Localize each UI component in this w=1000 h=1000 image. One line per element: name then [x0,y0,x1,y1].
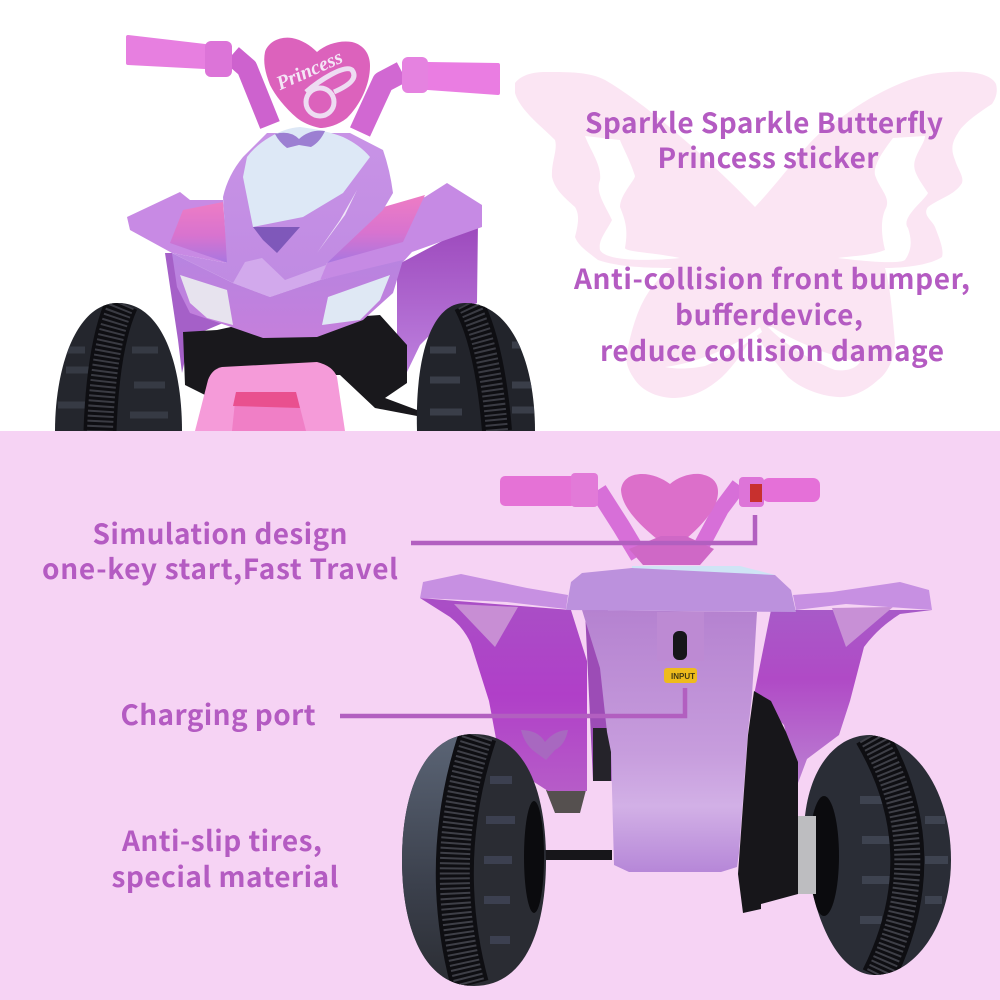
text: tires: Anti-slip tires, [121,820,322,860]
input label: INPUT [671,672,695,681]
callout line: charging port [340,688,685,716]
left headlight [180,275,233,325]
input label [664,668,697,683]
seat [632,566,775,575]
text: charging port: Charging port [120,694,316,734]
text: bumper: Anti-collision front bumper, [573,258,970,298]
fender top left [420,574,568,609]
icon: right front tire [416,303,535,431]
left tire back [546,790,586,813]
callout line: one-key start [411,515,755,543]
silver motor hub [798,816,816,894]
nose body [172,133,393,297]
text: one-key start [42,513,398,588]
icon: right rear wheel [800,730,955,980]
lower bumper [172,253,403,338]
undercarriage [183,315,417,416]
text: tires [112,820,339,896]
heart badge [264,38,370,128]
icon: butterfly sticker [275,131,325,148]
decal: left fender sticker [170,202,228,263]
text: butterfly sticker: Princess sticker [658,137,879,177]
bottom photo: rear of quad bike [400,473,955,990]
text: one-key start: one-key start,Fast Travel [42,548,398,588]
butterfly background shape [515,72,997,398]
rear fender right [754,610,932,783]
rear fender left [420,598,587,791]
charging port [673,631,687,660]
pink front frame [195,362,345,431]
icon: left rear wheel [400,730,550,990]
icon: handlebar: Princess [272,46,346,95]
rear fender drops [165,253,230,373]
nose slot [253,227,300,253]
icon: left front tire [55,303,182,431]
text: bumper: reduce collision damage [600,330,944,370]
front fender left [127,192,227,263]
text: one-key start: Simulation design [92,513,348,553]
text: bumper: bufferdevice, [675,294,863,334]
text: bumper [573,258,970,370]
decal: right fender sticker [327,195,425,263]
windscreen panel [243,127,370,227]
text: butterfly sticker: Sparkle Sparkle Butterfly [585,102,943,142]
axle [536,850,612,860]
rear tank [582,610,757,872]
text: tires: special material [112,856,339,896]
front fender right [320,183,482,280]
right headlight [322,275,390,325]
fender top right [793,582,932,610]
icon: faint butterfly on fender [521,730,568,760]
bracket and gearbox [738,691,798,913]
top photo: front of quad bike [50,37,540,435]
icon: rear handlebar [500,473,820,565]
icon: handlebar [128,37,498,132]
text: butterfly sticker [585,102,943,177]
bottom pink background panel [0,431,1000,1000]
